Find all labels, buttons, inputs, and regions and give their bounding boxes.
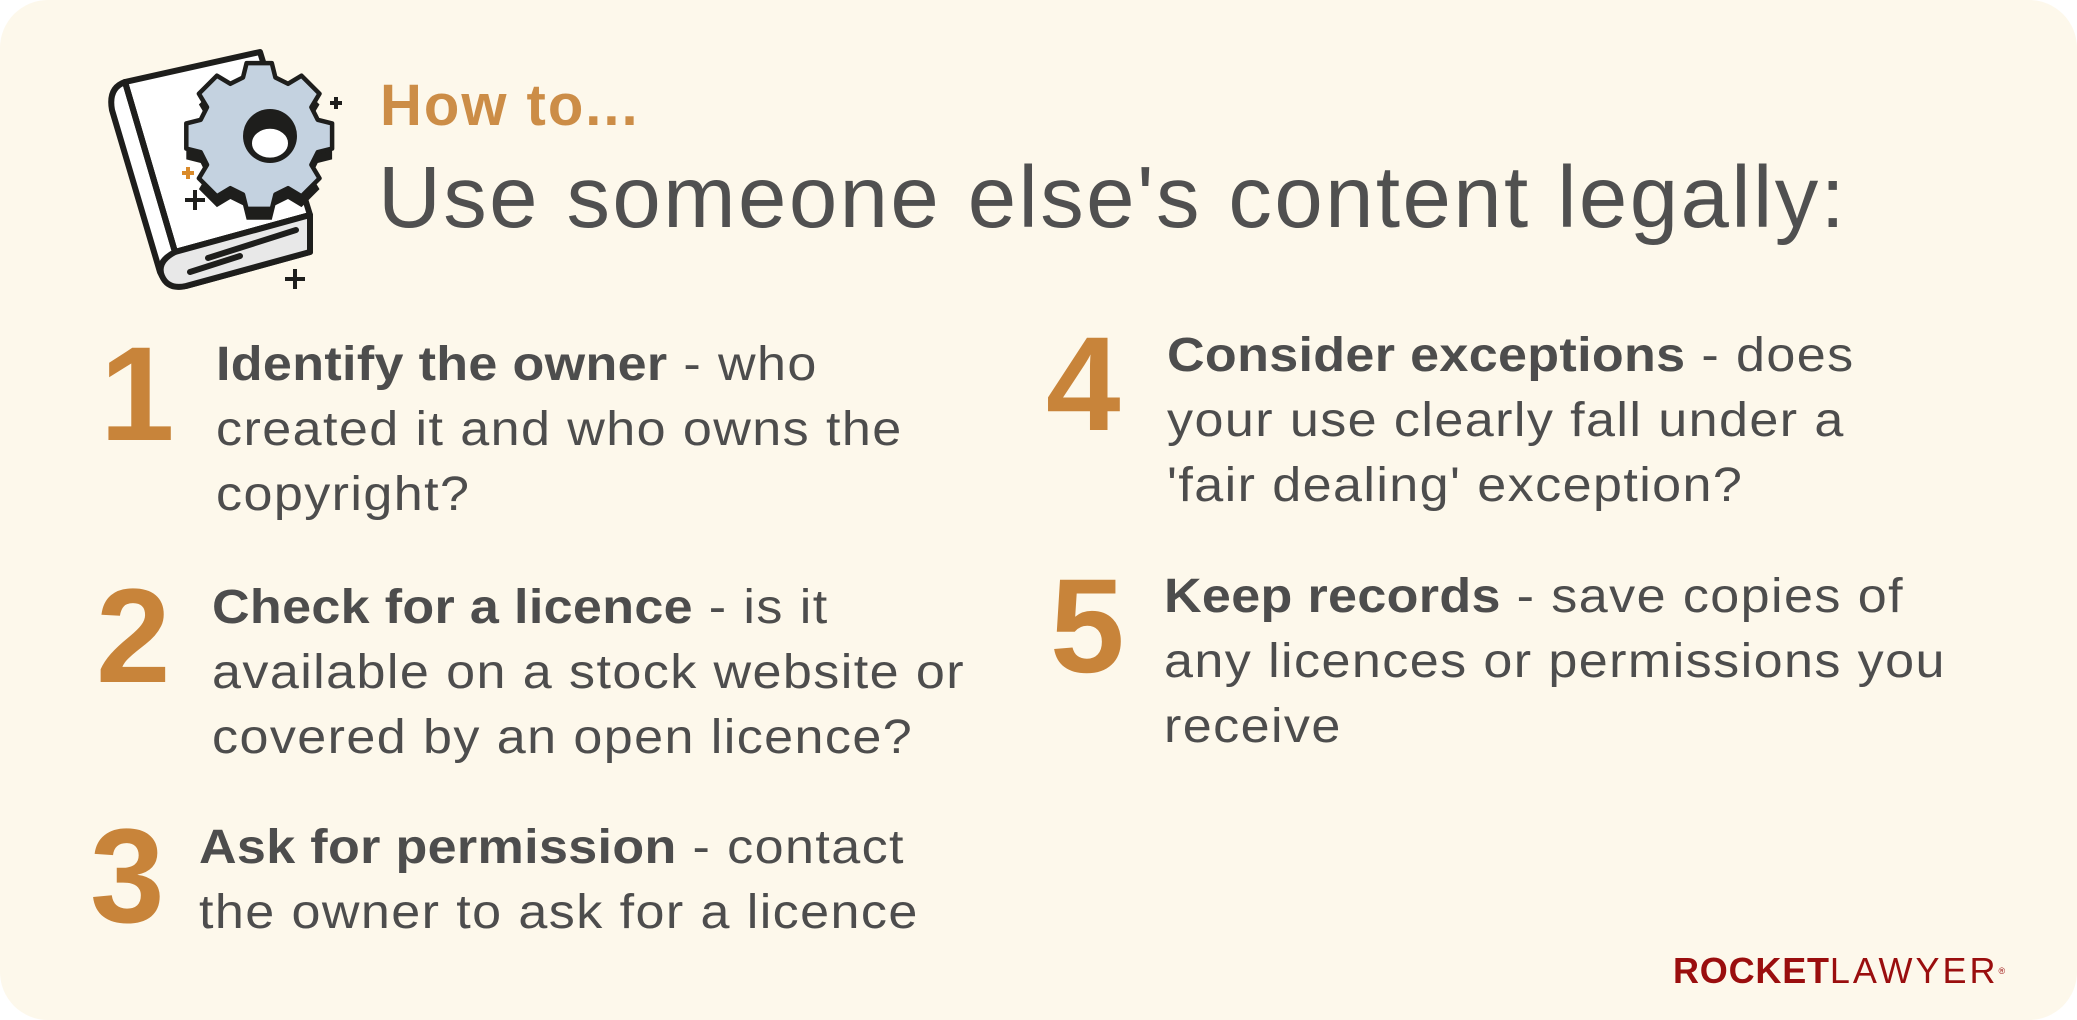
text 3: the owner to ask for a licence	[199, 886, 919, 939]
text 2: Check for a licence - is it	[212, 581, 829, 634]
step 3	[90, 802, 919, 951]
step 2	[96, 562, 965, 764]
number 2: 2	[96, 562, 171, 711]
logo: Rocket Lawyer: ROCKETLAWYER®	[1673, 950, 2006, 991]
text 2: available on a stock website or	[212, 646, 965, 699]
text 4: your use clearly fall under a	[1167, 394, 1845, 447]
text 1: created it and who owns the	[216, 403, 903, 456]
number 5: 5	[1050, 552, 1125, 701]
subtitle: How to: How to...	[380, 73, 640, 138]
text 3: Ask for permission - contact	[199, 821, 905, 874]
text 1: Identify the owner - who	[216, 338, 818, 391]
icon: book with gear	[108, 49, 342, 290]
text 4: 'fair dealing' exception?	[1167, 459, 1743, 512]
text 5: receive	[1164, 700, 1342, 753]
text 2	[212, 581, 965, 764]
number 1: 1	[100, 320, 175, 469]
step 1	[100, 320, 903, 521]
text 4: Consider exceptions - does	[1167, 329, 1855, 382]
number 4: 4	[1046, 310, 1121, 459]
text 5: Keep records - save copies of	[1164, 570, 1904, 623]
step 4	[1046, 310, 1855, 512]
number 3: 3	[90, 802, 165, 951]
text 5	[1164, 570, 1946, 753]
title: Use someone else's content legally:	[378, 149, 1847, 246]
text 5: any licences or permissions you	[1164, 635, 1946, 688]
text 4	[1167, 329, 1855, 512]
text 3	[199, 821, 919, 939]
text 1: copyright?	[216, 468, 470, 521]
step 5	[1050, 552, 1946, 753]
text 2: covered by an open licence?	[212, 711, 913, 764]
text 1	[216, 338, 903, 521]
